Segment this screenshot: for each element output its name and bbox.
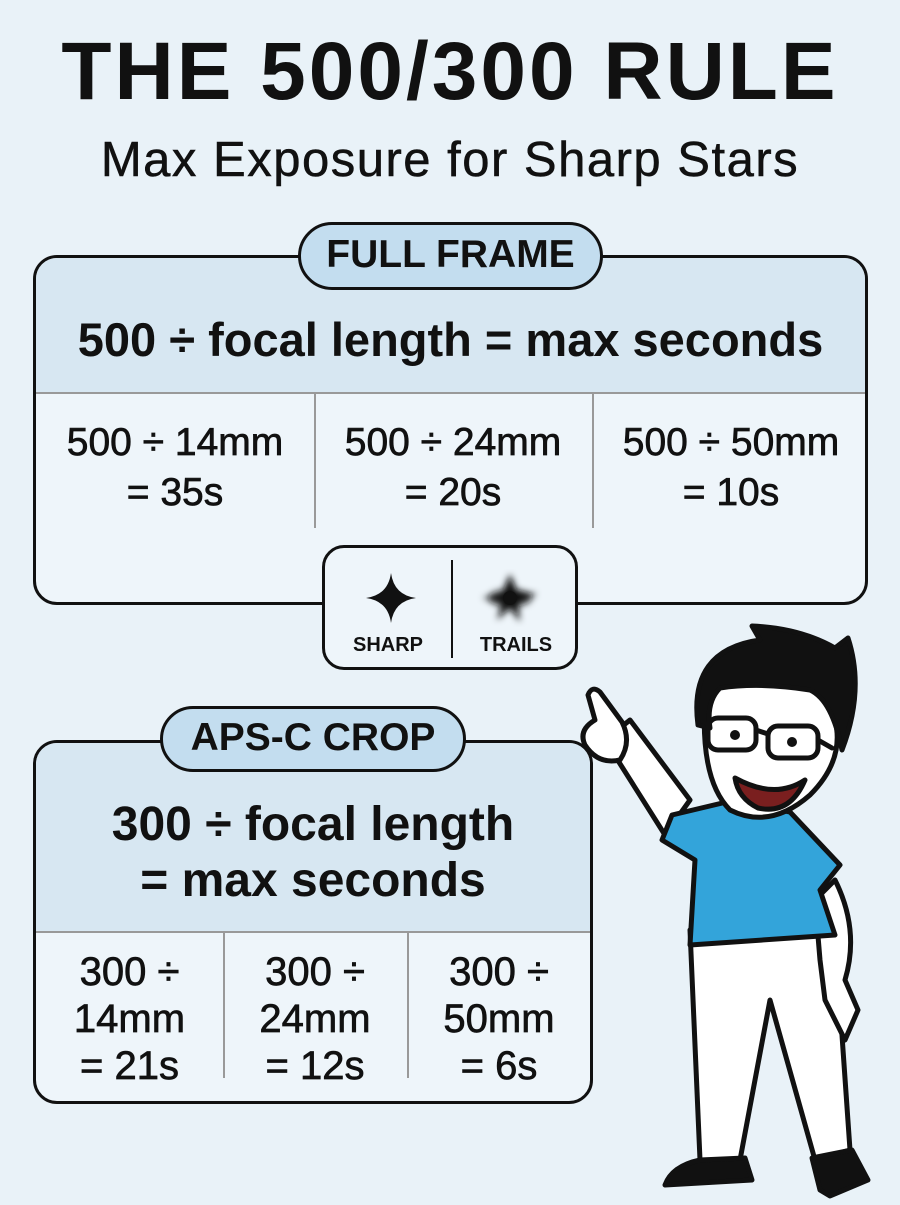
subtitle: Max Exposure for Sharp Stars (101, 133, 799, 187)
formula band: full frame (36, 258, 865, 394)
hand pointing (583, 689, 627, 761)
icon: sharp star (366, 573, 416, 623)
formula band: aps-c: = max seconds (140, 854, 486, 907)
panel: full frame (33, 255, 868, 605)
pants (690, 930, 850, 1160)
example 14mm: 14mm (74, 997, 185, 1041)
example 24mm: = 20s (405, 471, 501, 514)
shirt (662, 800, 840, 945)
example 14mm: = 21s (80, 1044, 179, 1088)
example 14mm: 500 ÷ 14mm (67, 421, 283, 464)
example 24mm: 24mm (259, 997, 371, 1041)
example 14mm (74, 950, 185, 1088)
character: pointing man (580, 624, 870, 1198)
example 14mm: = 35s (127, 471, 223, 514)
formula band: full frame: 500 ÷ focal length = max seconds (78, 313, 823, 366)
example 24mm (259, 950, 371, 1088)
example 50mm: 500 ÷ 50mm (623, 421, 839, 464)
right arm (815, 880, 858, 1040)
example 50mm (623, 421, 839, 514)
title: THE 500/300 RULE (61, 26, 839, 117)
pill: full frame (298, 222, 603, 290)
icon: trailed star (480, 571, 540, 624)
example 14mm: 300 ÷ (80, 950, 179, 994)
shoes (665, 1158, 752, 1185)
example 50mm: 300 ÷ (449, 950, 549, 994)
glasses (708, 718, 756, 750)
formula band: aps-c (36, 743, 590, 933)
pill: aps-c (160, 706, 466, 772)
raised arm (605, 720, 690, 835)
mouth (735, 778, 805, 809)
example 14mm (67, 421, 283, 514)
pill: full frame: FULL FRAME (326, 233, 575, 276)
panel: aps-c (33, 740, 593, 1104)
legend: sharp vs trails (322, 545, 578, 670)
example 50mm: 50mm (443, 997, 555, 1041)
example 50mm: = 6s (461, 1044, 537, 1088)
pill: aps-c: APS-C CROP (191, 716, 435, 759)
hair (697, 626, 855, 750)
example 50mm (443, 950, 555, 1088)
example 24mm (345, 421, 561, 514)
formula band: aps-c: 300 ÷ focal length (112, 798, 514, 851)
example 50mm: = 10s (683, 471, 779, 514)
label: trails: TRAILS (480, 634, 552, 656)
head (704, 660, 837, 817)
example 24mm: 300 ÷ (265, 950, 365, 994)
example 24mm: 500 ÷ 24mm (345, 421, 561, 464)
label: sharp: SHARP (353, 634, 423, 656)
example 24mm: = 12s (266, 1044, 364, 1088)
